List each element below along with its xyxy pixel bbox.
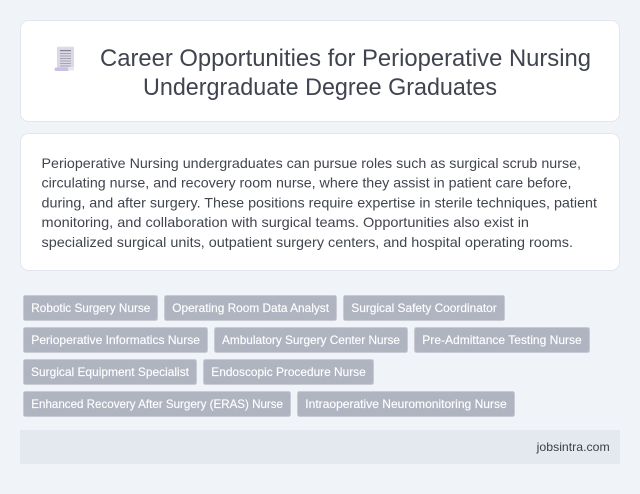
tag: Perioperative Informatics Nurse	[24, 328, 208, 352]
tag: Surgical Equipment Specialist: Surgical Equipment Specialist	[31, 365, 190, 379]
tag: Perioperative Informatics Nurse: Perioperative Informatics Nurse	[31, 333, 200, 347]
tag list: related careers	[24, 296, 590, 416]
tag: Operating Room Data Analyst	[164, 296, 336, 320]
tag: Ambulatory Surgery Center Nurse: Ambulatory Surgery Center Nurse	[222, 333, 400, 347]
tag: Endoscopic Procedure Nurse: Endoscopic Procedure Nurse	[211, 365, 366, 379]
tag: Surgical Safety Coordinator	[344, 296, 504, 320]
panel: header	[20, 20, 620, 122]
tag: Intraoperative Neuromonitoring Nurse	[298, 392, 514, 416]
tag: Robotic Surgery Nurse: Robotic Surgery Nurse	[31, 301, 151, 315]
text block: description: specialized surgical units, outpatient surgery centers, and hospital operating rooms.	[42, 234, 573, 250]
text block: description: circulating nurse, and recovery room nurse, where they assist in patient care before,	[42, 175, 572, 191]
title: Undergraduate Degree Graduates	[143, 74, 497, 101]
text block: description	[42, 155, 597, 250]
tag: Operating Room Data Analyst: Operating Room Data Analyst	[172, 301, 330, 315]
tag: Enhanced Recovery After Surgery (ERAS) Nurse	[24, 392, 290, 416]
tag: Surgical Equipment Specialist	[24, 360, 196, 384]
footer bar	[20, 430, 620, 464]
tag: Intraoperative Neuromonitoring Nurse: Intraoperative Neuromonitoring Nurse	[305, 397, 507, 411]
title: Career Opportunities for Perioperative Nursing	[100, 45, 591, 72]
text block: description: monitoring, and collaboration with surgical teams. Opportunities also exist in	[42, 214, 529, 230]
tag: Pre-Admittance Testing Nurse	[414, 328, 590, 352]
text block: description: during, and after surgery. These positions require expertise in sterile techniques, patient	[42, 194, 597, 210]
tag: Endoscopic Procedure Nurse	[204, 360, 374, 384]
title	[100, 45, 591, 101]
text block: description: Perioperative Nursing undergraduates can pursue roles such as surgical scrub nurse,	[42, 155, 581, 171]
icon: paper scroll	[54, 46, 74, 71]
tag: Enhanced Recovery After Surgery (ERAS) Nurse: Enhanced Recovery After Surgery (ERAS) Nurse	[31, 397, 283, 411]
tag: Pre-Admittance Testing Nurse: Pre-Admittance Testing Nurse	[422, 333, 582, 347]
tag: Robotic Surgery Nurse	[24, 296, 158, 320]
footer source text: jobsintra.com	[536, 440, 610, 454]
panel: description	[20, 134, 620, 270]
tag: Surgical Safety Coordinator: Surgical Safety Coordinator	[351, 301, 497, 315]
tag: Ambulatory Surgery Center Nurse	[214, 328, 408, 352]
